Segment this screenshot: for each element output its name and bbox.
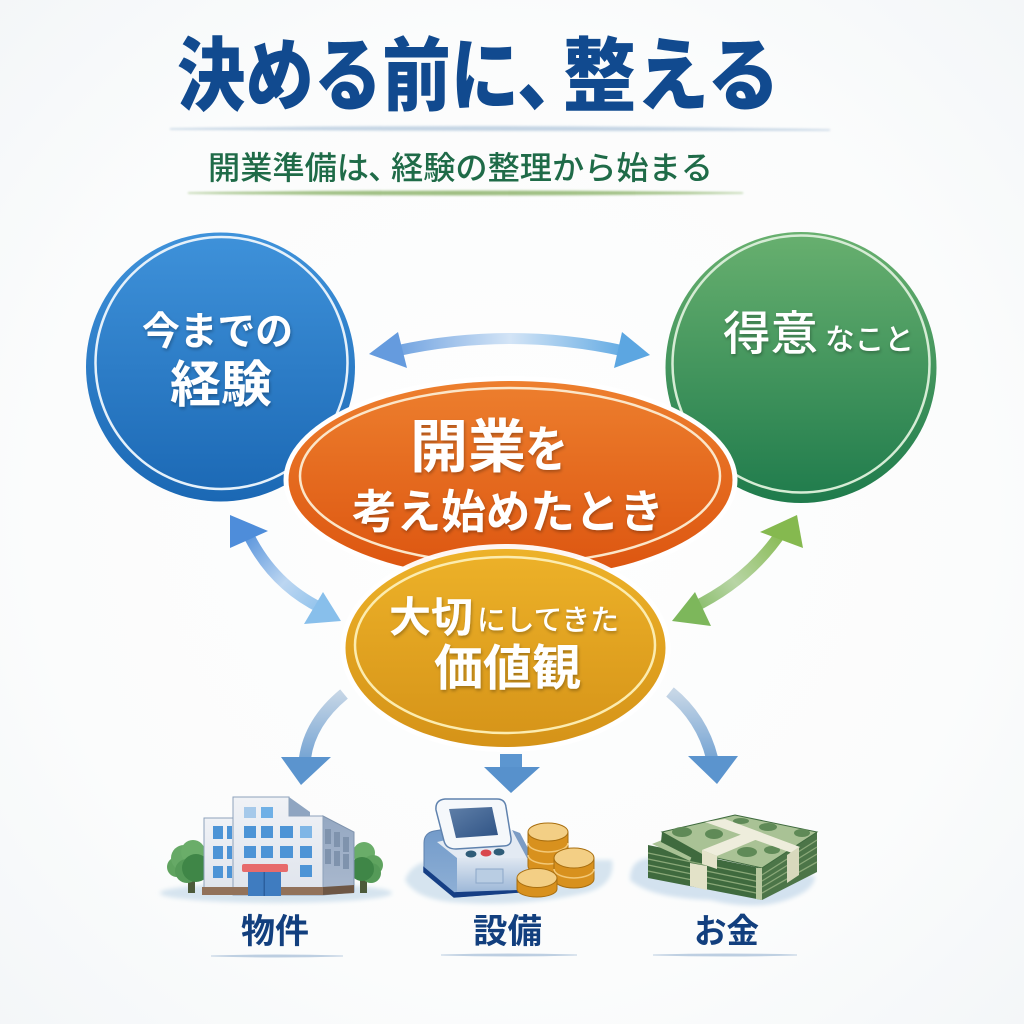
panel: center orange ellipse: [284, 376, 738, 584]
subtitle: 経験の整理から始まる: [391, 150, 713, 186]
icon: left tree: [167, 840, 210, 893]
icon: coin stack front: [517, 868, 557, 897]
center label: を: [525, 422, 568, 478]
label: property: 物件: [241, 913, 309, 951]
label: property: [211, 913, 343, 957]
label: equipment: [441, 913, 577, 956]
arrow: experience to strengths: [369, 332, 650, 368]
strengths label: なこと: [825, 324, 914, 357]
icon: stack of money: [630, 815, 817, 906]
icon: building: [160, 797, 392, 903]
arrow: experience to values: [230, 515, 341, 624]
title underline: [170, 127, 830, 130]
label: equipment: 設備: [473, 913, 542, 951]
arrow: values to property: [281, 694, 344, 785]
experience label: [142, 311, 293, 413]
panel: experience circle: [86, 232, 355, 502]
panel: values yellow ellipse: [340, 544, 670, 752]
center label: [352, 415, 664, 538]
arrow: values to money: [670, 692, 738, 784]
icon: coin stack back: [528, 823, 568, 875]
title: 整える: [563, 32, 780, 121]
subtitle underline: [188, 191, 743, 195]
subtitle: 開業準備は: [208, 150, 369, 186]
arrow: values to equipment: [484, 754, 540, 793]
subtitle: 、: [368, 150, 400, 186]
title: 、: [517, 32, 589, 121]
panel: strengths circle: [666, 232, 936, 503]
subtitle: [208, 150, 713, 186]
arrow: strengths to values: [672, 515, 803, 626]
strengths label: 得意: [723, 307, 818, 360]
title: 決める前に: [177, 32, 519, 121]
values label: [389, 594, 619, 696]
icon: coin stack right: [554, 848, 594, 888]
center label: 考え始めたとき: [352, 486, 664, 538]
icon: right tree: [350, 842, 383, 893]
strengths label: [723, 307, 914, 360]
experience label: 経験: [170, 357, 272, 413]
values label: にしてきた: [477, 605, 619, 637]
title: [177, 32, 780, 121]
values label: 価値観: [434, 642, 581, 696]
icon: cash register and coins: [405, 799, 612, 904]
label: money: お金: [694, 913, 759, 951]
experience label: 今までの: [142, 311, 293, 354]
center label: 開業: [410, 415, 526, 480]
values label: 大切: [389, 594, 473, 641]
